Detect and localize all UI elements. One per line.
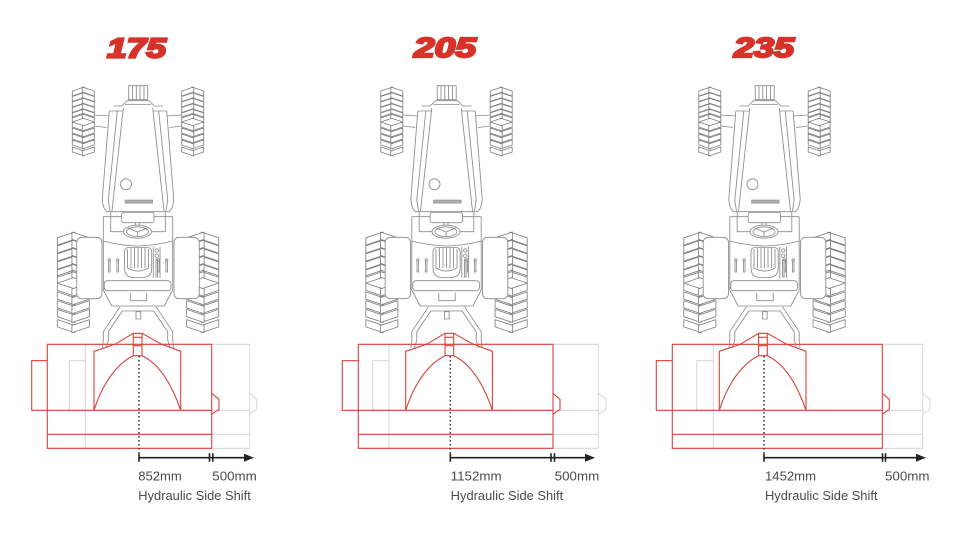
dimension labels: 175: 500mm bbox=[212, 470, 257, 484]
attachment outline: 175 bbox=[32, 344, 219, 448]
shifted attachment outline: 175 bbox=[69, 344, 257, 448]
attachment outline: 235 bbox=[656, 344, 889, 448]
dimension labels: 235: 1452mm bbox=[765, 470, 816, 484]
dimension labels: 205: 1152mm bbox=[451, 470, 502, 484]
dimension labels: 175 bbox=[138, 470, 257, 503]
dimension arrow: 205 bbox=[450, 356, 595, 462]
title: 205: 205 bbox=[413, 32, 477, 63]
tractor top view: 205 bbox=[366, 86, 527, 348]
hitch frame: 175 bbox=[94, 333, 181, 410]
attachment diagram: 235 bbox=[656, 333, 930, 448]
shifted attachment outline: 235 bbox=[697, 344, 930, 448]
shifted attachment outline: 205 bbox=[373, 344, 606, 448]
attachment diagram: 205 bbox=[342, 333, 606, 448]
tractor top view: 175 bbox=[57, 86, 219, 348]
dimension labels: 205: Hydraulic Side Shift bbox=[451, 489, 564, 503]
title: 175: 175 bbox=[107, 33, 167, 64]
dimension labels: 235: Hydraulic Side Shift bbox=[765, 489, 878, 503]
dimension labels: 175: 852mm bbox=[138, 470, 182, 484]
dimension labels: 175: Hydraulic Side Shift bbox=[138, 489, 251, 503]
dimension arrow: 235 bbox=[764, 356, 926, 462]
dimension labels: 235: 500mm bbox=[885, 470, 930, 484]
title: 235: 235 bbox=[733, 32, 795, 63]
dimension labels: 235 bbox=[765, 470, 930, 503]
dimension labels: 205 bbox=[451, 470, 599, 503]
hitch frame: 235 bbox=[719, 333, 806, 410]
dimension arrow: 175 bbox=[139, 356, 254, 462]
attachment outline: 205 bbox=[342, 344, 560, 448]
tractor top view: 235 bbox=[684, 86, 845, 348]
dimension labels: 205: 500mm bbox=[555, 470, 599, 484]
attachment diagram: 175 bbox=[32, 333, 257, 448]
hitch frame: 205 bbox=[406, 333, 492, 410]
